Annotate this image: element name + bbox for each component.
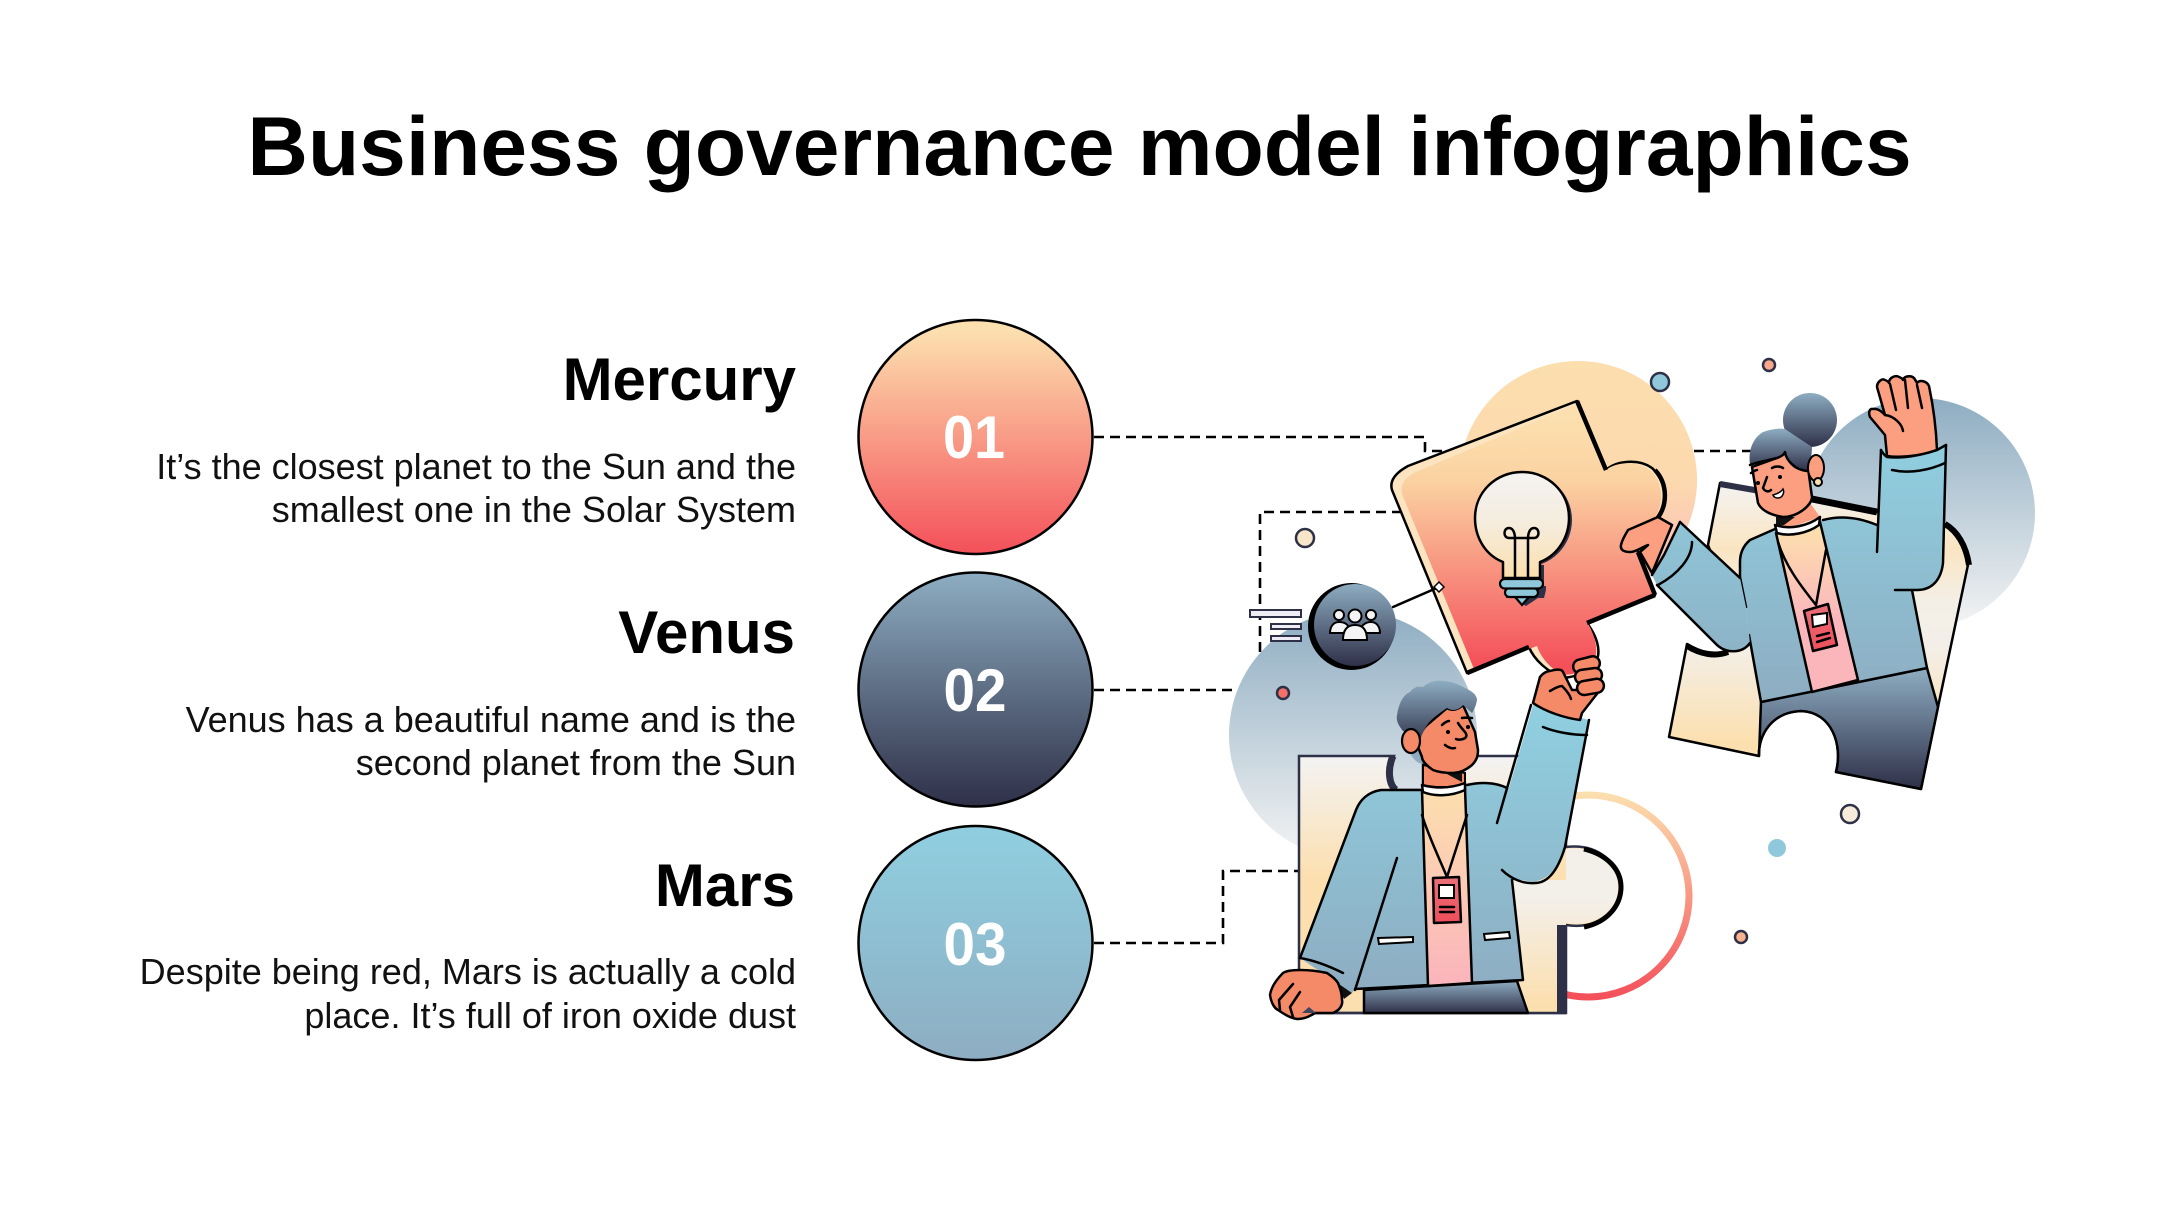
main puzzle piece with lightbulb	[1391, 401, 1665, 678]
description: Mars: Despite being red, Mars is actually a cold	[140, 951, 796, 992]
hair bun	[1783, 393, 1837, 447]
jacket: man	[1300, 705, 1589, 993]
sleeve cuff: woman	[1881, 445, 1946, 472]
neck: man	[1423, 765, 1465, 787]
circle 02: 02	[944, 657, 1006, 724]
collar: man	[1422, 783, 1465, 795]
item 1: Mercury text	[156, 346, 797, 530]
circle 01	[858, 320, 1092, 554]
outstretched arm	[1652, 522, 1750, 652]
lightbulb	[1475, 472, 1572, 606]
face: man	[1442, 718, 1472, 748]
pants: man	[1364, 981, 1528, 1013]
puzzle shape	[1391, 401, 1665, 678]
hair back: man	[1410, 745, 1425, 764]
side bars	[1250, 610, 1301, 641]
shirt: woman	[1776, 522, 1858, 692]
heading: Venus: Venus	[618, 599, 795, 666]
pockets	[1378, 932, 1510, 944]
description: Mars: place. It’s full of iron oxide dust	[304, 995, 796, 1036]
jacket: woman	[1740, 445, 1946, 702]
man's puzzle piece	[1299, 756, 1621, 1013]
shirt: man	[1422, 788, 1472, 986]
head: man	[1418, 705, 1478, 773]
people icon	[1330, 610, 1380, 640]
badge: man	[1422, 815, 1467, 923]
description: Venus: Venus has a beautiful name and is the	[186, 699, 796, 740]
connector lines	[1094, 437, 1760, 943]
collar: woman	[1775, 517, 1820, 535]
decorative dots	[1277, 359, 1859, 943]
description: Mercury: It’s the closest planet to the Sun and the	[156, 446, 796, 487]
description: Venus	[186, 699, 796, 783]
head: woman	[1752, 452, 1812, 517]
raised hand	[1869, 376, 1937, 457]
item 3: Mars text	[140, 852, 796, 1036]
description: Venus: second planet from the Sun	[356, 742, 796, 783]
neck: woman	[1777, 500, 1820, 530]
description: Mars	[140, 951, 796, 1036]
cuff lines	[1300, 727, 1587, 973]
man figure	[1270, 655, 1605, 1019]
description: Mercury	[156, 446, 796, 530]
illustration: business team with puzzle pieces	[1094, 359, 2035, 1019]
raised hand: man	[1533, 655, 1605, 720]
ear and earring	[1808, 455, 1824, 486]
background blobs	[1229, 361, 2035, 997]
group icon badge	[1250, 582, 1444, 670]
woman figure	[1621, 376, 1946, 702]
ear: man	[1402, 729, 1420, 753]
hair: man	[1397, 681, 1477, 745]
woman's puzzle piece	[1669, 483, 1969, 789]
lower hand	[1270, 970, 1352, 1019]
circle 01: 01	[943, 404, 1005, 471]
circle 02	[858, 572, 1092, 806]
badge: woman	[1778, 542, 1837, 651]
heading: Mercury: Mercury	[563, 346, 797, 413]
heading: Mars: Mars	[655, 852, 795, 919]
description: Mercury: smallest one in the Solar System	[272, 489, 796, 530]
pants: woman	[1759, 668, 1938, 789]
circle 03	[858, 826, 1092, 1060]
pointer line	[1393, 587, 1439, 607]
title: Business governance model infographics	[247, 99, 1912, 193]
hair: woman	[1750, 429, 1812, 471]
item 2: Venus text	[186, 599, 796, 783]
badge circle	[1308, 583, 1395, 670]
circle 03: 03	[944, 911, 1006, 978]
face: woman	[1751, 466, 1784, 498]
hand holding puzzle	[1621, 517, 1672, 573]
